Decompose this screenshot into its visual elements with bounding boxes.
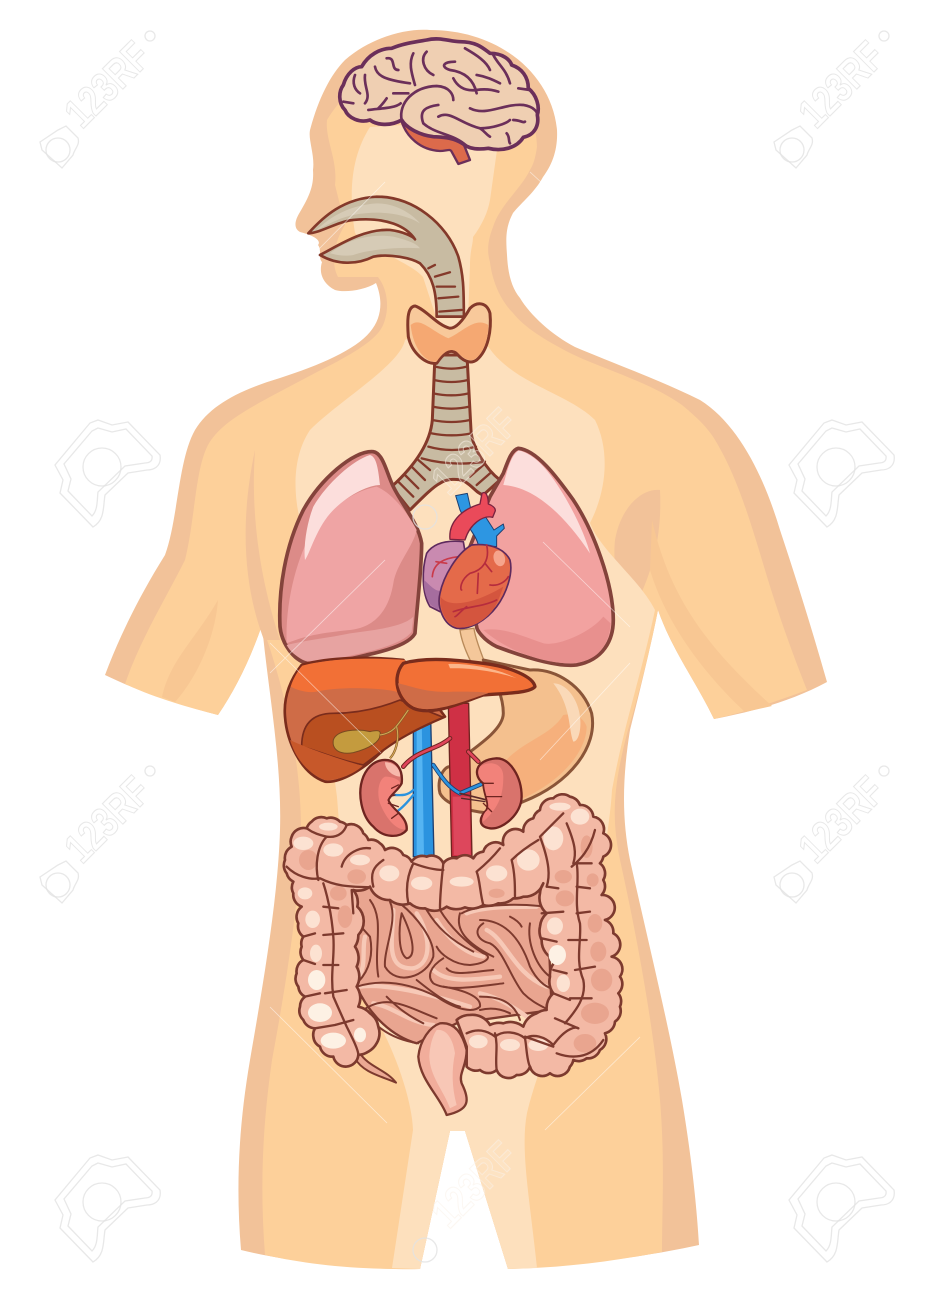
camera badge: right lower	[789, 1155, 894, 1262]
right kidney	[477, 758, 522, 828]
watermark: top left	[40, 31, 159, 168]
colon shading	[293, 803, 612, 1053]
watermark: middle right	[774, 766, 893, 903]
left lung	[280, 452, 422, 664]
small intestine	[353, 887, 552, 1043]
watermark: chest centre	[413, 399, 526, 529]
rectum	[418, 1023, 467, 1115]
camera badge: left lower	[55, 1155, 160, 1262]
trachea and airway	[308, 197, 464, 317]
right lung	[463, 448, 613, 665]
left atrium	[423, 541, 470, 612]
watermark: chest centre: 123RF	[422, 399, 526, 503]
camera badge: right upper	[789, 420, 894, 527]
renal vessels	[393, 738, 487, 812]
watermark: middle left: 123RF	[55, 767, 159, 871]
gallbladder	[333, 710, 408, 758]
watermark: middle left	[40, 766, 159, 903]
ventricle	[439, 545, 511, 628]
kidneys	[360, 758, 522, 836]
vena cava	[413, 717, 434, 857]
watermark: top right: 123RF	[789, 32, 893, 136]
esophagus	[460, 628, 485, 663]
large intestine	[284, 794, 622, 1115]
vena cava and aorta	[393, 703, 487, 857]
brain folds	[343, 48, 537, 146]
brain stem and cerebellum	[402, 122, 470, 164]
aortic arch	[450, 493, 495, 540]
brain	[340, 39, 538, 164]
appendix	[355, 1053, 396, 1083]
watermark hairlines	[270, 172, 640, 1130]
stomach	[439, 660, 593, 813]
lower trachea and bronchi	[392, 355, 500, 510]
watermark: top right	[774, 31, 893, 168]
camera badge: left upper	[55, 420, 160, 527]
intestine loop highlights	[358, 907, 547, 1025]
left kidney	[360, 760, 407, 836]
colon outline	[284, 794, 622, 1078]
aorta	[448, 703, 472, 857]
watermark: bottom centre: 123RF	[422, 1132, 526, 1236]
pulmonary artery	[456, 493, 504, 547]
intestine loop outlines	[355, 900, 552, 1043]
left liver lobe	[285, 658, 445, 782]
right liver lobe	[397, 659, 535, 711]
cerebrum	[340, 39, 538, 150]
watermark: middle right: 123RF	[789, 767, 893, 871]
thyroid	[408, 304, 490, 363]
heart	[423, 493, 511, 628]
liver	[285, 658, 535, 782]
watermark: bottom centre	[413, 1132, 526, 1262]
coronary vessels	[453, 545, 508, 617]
colon folds	[287, 813, 603, 1070]
watermark: top left: 123RF	[55, 32, 159, 136]
